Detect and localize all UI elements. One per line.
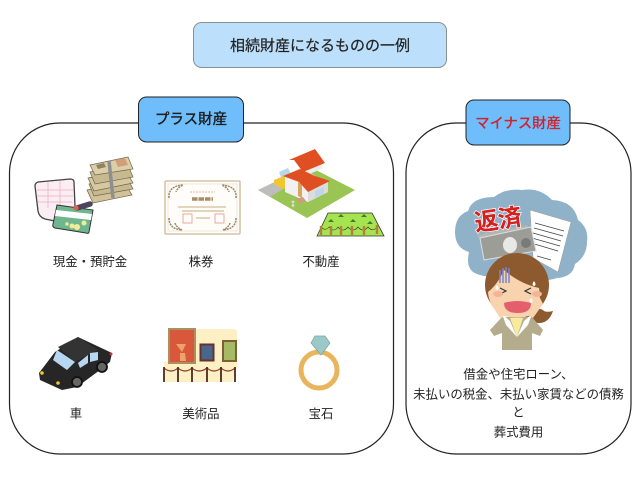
document [530, 210, 571, 272]
label: real estate: 不動産 [302, 255, 340, 269]
eyes [500, 288, 531, 294]
text: minus assets description: と [512, 406, 525, 420]
icon: diamond ring [301, 336, 337, 388]
text: minus assets description: 葬式費用 [494, 424, 543, 440]
icon: banknote stack [87, 157, 133, 203]
label: stocks: 株券 [189, 254, 213, 269]
label: car: 車 [70, 407, 82, 421]
ponytail [523, 309, 553, 323]
icon: art gallery [164, 329, 237, 382]
icon: passbook [35, 179, 75, 222]
illustration: worried woman with debt [455, 189, 587, 350]
icon: bank card [53, 205, 93, 233]
heading: plus assets [138, 97, 244, 142]
heading: minus assets: マイナス財産 [475, 115, 561, 132]
panel: plus assets [10, 123, 394, 454]
cheeks [493, 291, 503, 297]
mouth [504, 301, 531, 313]
banknotes [477, 225, 533, 243]
jacket [490, 317, 543, 350]
title: 相続財産になるものの一例 [230, 38, 410, 54]
label: cash and savings: 現金・預貯金 [53, 255, 127, 269]
title [194, 22, 446, 68]
sweat drops [496, 281, 536, 303]
label: art: 美術品 [182, 406, 220, 421]
label: jewelry: 宝石 [309, 407, 333, 421]
icon: house on lot [258, 149, 355, 218]
icon: cash and savings [35, 157, 133, 233]
hands [491, 296, 543, 318]
hair [485, 253, 549, 317]
text: minus assets description [413, 368, 624, 440]
thought cloud [455, 189, 587, 281]
icon: land plot [317, 213, 384, 236]
face [488, 270, 540, 318]
icon: stock certificate [165, 181, 240, 234]
icon: car [39, 337, 112, 390]
panel: minus assets [406, 123, 631, 454]
icon: seal [77, 204, 90, 208]
heading: plus assets: プラス財産 [155, 111, 227, 128]
text: minus assets description: 未払いの税金、未払い家賃などの債務 [413, 386, 624, 402]
repayment stamp text: 返済 [473, 204, 524, 237]
heading: minus assets [466, 100, 570, 145]
text: minus assets description: 借金や住宅ローン、 [463, 368, 574, 382]
worry lines [500, 267, 509, 283]
